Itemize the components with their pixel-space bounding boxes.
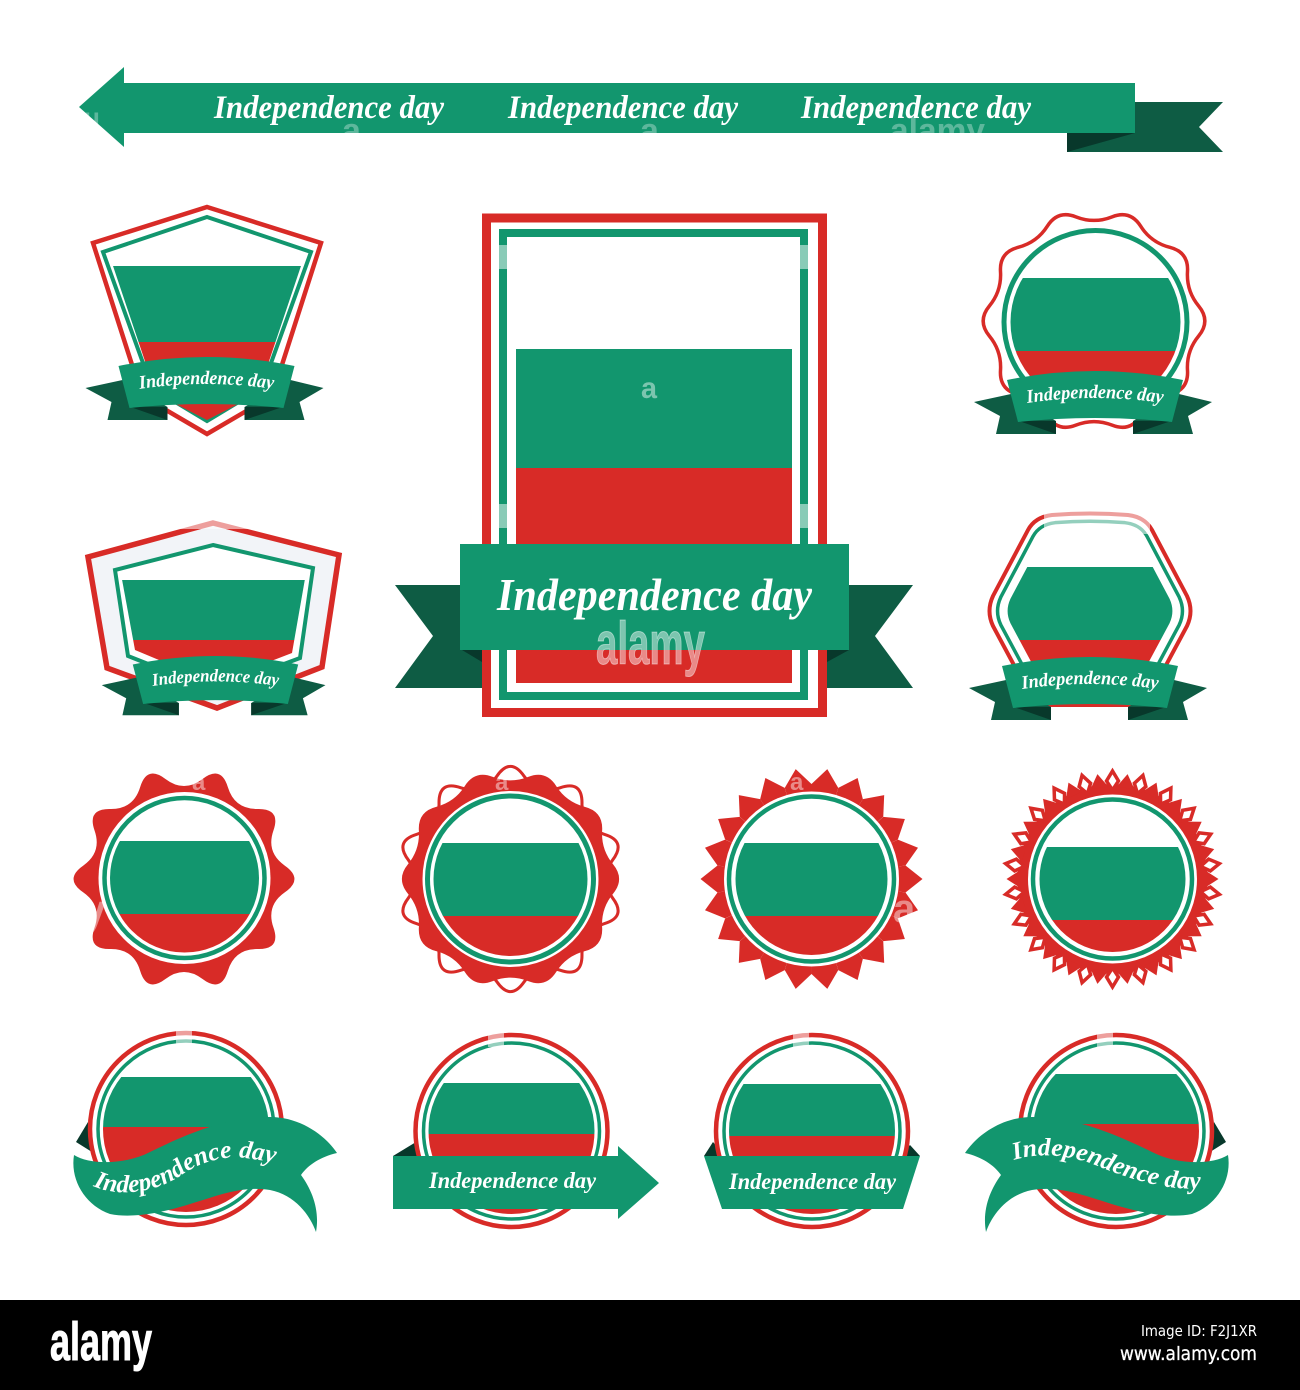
footer bar <box>0 1300 1300 1390</box>
top arrow banner <box>79 67 1223 152</box>
top arrow banner: Independence day <box>800 90 1031 126</box>
badge: scalloped seal with loops: a <box>495 769 509 796</box>
panel: central flag card: alamy <box>596 610 705 677</box>
badge: rounded hexagon <box>969 512 1207 720</box>
footer bar: alamy <box>50 1312 152 1372</box>
badge: circle with right swoosh ribbon <box>965 1032 1229 1232</box>
badge: circle with right swoosh ribbon: Independence day <box>1012 1138 1201 1194</box>
badge: red scalloped seal: a <box>192 769 206 796</box>
badge: circle with arrow ribbon: Independence day <box>428 1168 597 1193</box>
badge: circle with left swoosh ribbon: Independence day <box>92 1141 277 1197</box>
panel: central flag card <box>395 218 913 712</box>
badge: wide shield: Independence day <box>152 669 280 689</box>
top arrow banner: alamy <box>890 112 985 150</box>
badge: circle with left swoosh ribbon <box>73 1030 337 1232</box>
top arrow banner: a <box>342 112 362 150</box>
badge: starburst seal: a <box>893 887 916 931</box>
badge: pointed shield: Independence day <box>140 370 274 392</box>
top arrow banner: a <box>640 112 660 150</box>
badge: circle with arrow ribbon <box>393 1031 659 1227</box>
badge: pointed shield <box>86 204 324 437</box>
panel: central flag card: a <box>641 372 657 405</box>
panel: central flag card: Independence day <box>496 569 813 620</box>
top arrow banner: Independence day <box>213 90 444 126</box>
badge: wave outline circle <box>974 212 1212 434</box>
badge: circle with trapezoid ribbon <box>704 1031 920 1227</box>
top arrow banner: u <box>84 102 100 132</box>
footer bar: Image ID: F2J1XR <box>1141 1322 1257 1340</box>
badge: serrated seal with diamonds <box>1003 769 1222 989</box>
badge: starburst seal <box>700 767 922 991</box>
badge: wide shield <box>84 520 342 716</box>
badge: starburst seal: a <box>790 769 804 796</box>
badge: red scalloped seal <box>74 769 294 984</box>
badge: wave outline circle: Independence day <box>1027 384 1164 406</box>
footer bar: www.alamy.com <box>1120 1343 1257 1365</box>
badge: scalloped seal with loops <box>401 764 620 994</box>
top arrow banner: Independence day <box>507 90 738 126</box>
badge: rounded hexagon: Independence day <box>1022 670 1159 692</box>
badge: circle with trapezoid ribbon: Independence day <box>728 1169 897 1194</box>
badge: red scalloped seal: y <box>82 886 107 935</box>
